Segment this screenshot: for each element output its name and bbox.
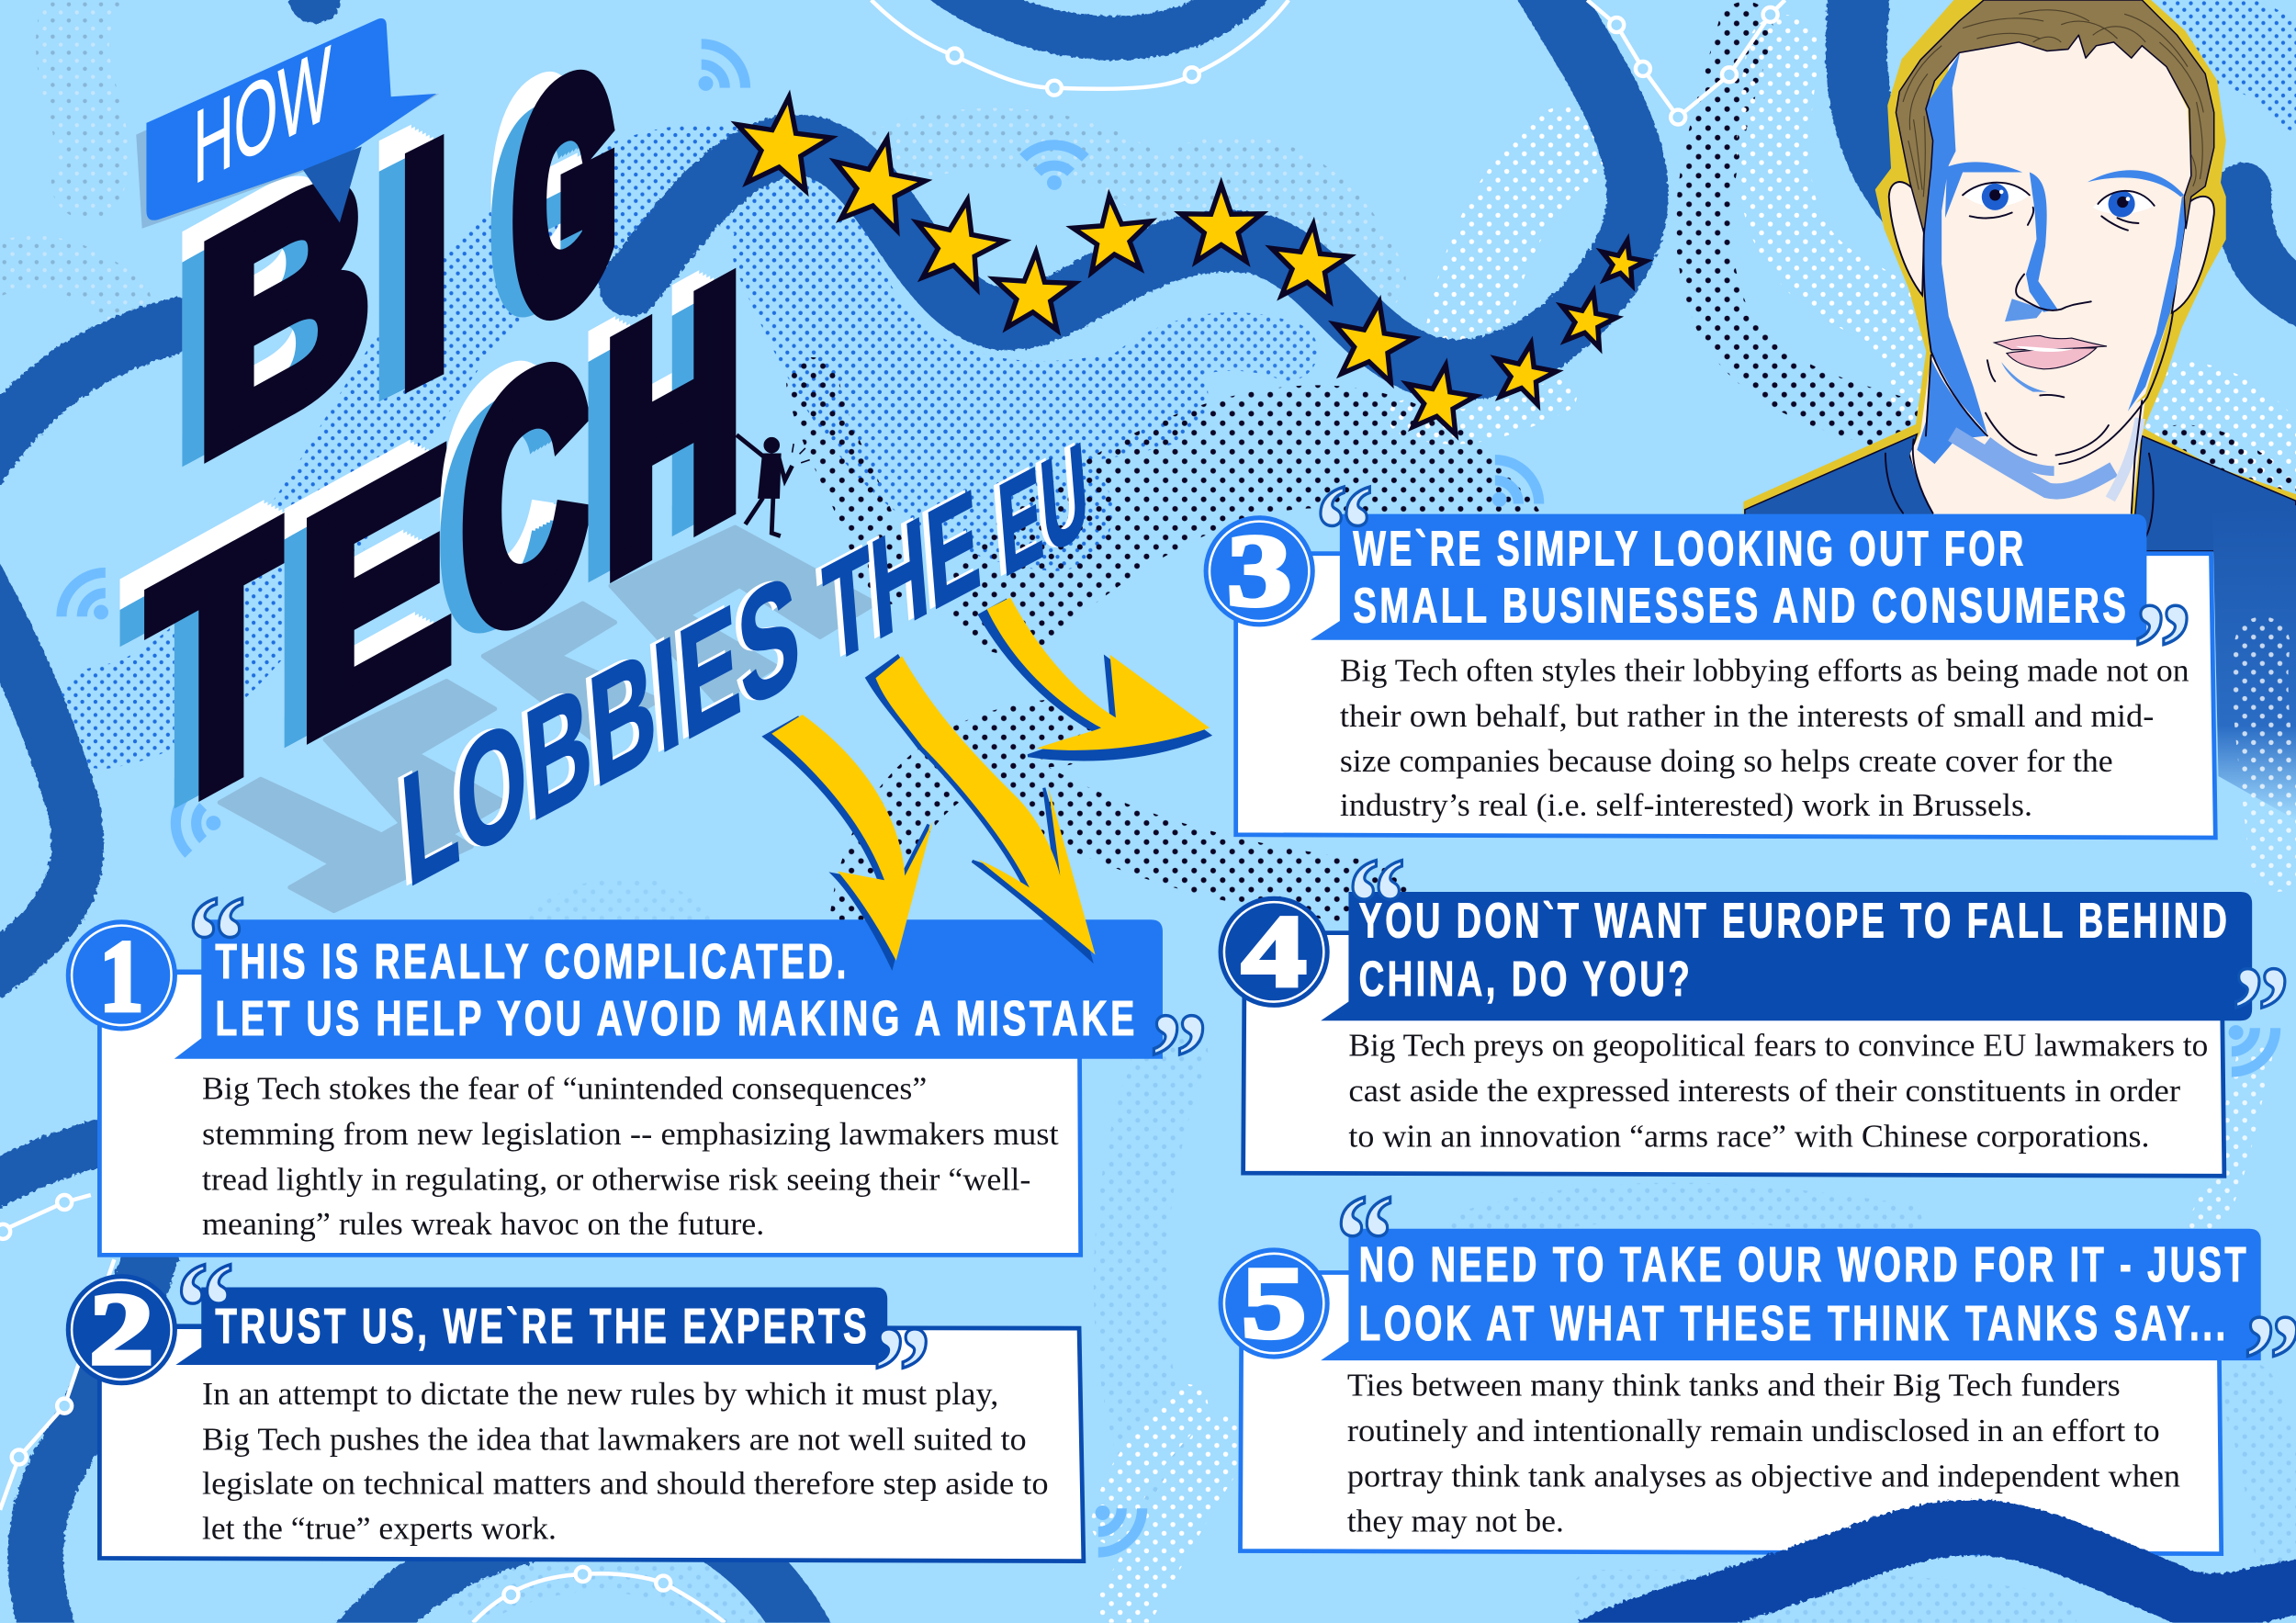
card 3 body text: Big Tech often styles their lobbying efforts as being made not on <box>1340 652 2189 688</box>
portrait: jaw lines <box>1885 229 2173 537</box>
portrait: mouth <box>1995 335 2107 369</box>
card 2 quote marks <box>175 1237 931 1444</box>
card 1 body text: stemming from new legislation -- emphasizing lawmakers must <box>202 1116 1059 1152</box>
card 1 body text: Big Tech stokes the fear of “unintended consequences” <box>202 1071 927 1107</box>
card 1 heading: THIS IS REALLY COMPLICATED. <box>215 934 850 989</box>
card 1 heading: LET US HELP YOU AVOID MAKING A MISTAKE <box>215 991 1138 1046</box>
portrait: shirt <box>1745 434 2296 551</box>
card 2 body text: legislate on technical matters and should therefore step aside to <box>202 1465 1049 1501</box>
card 5 body text: portray think tank analyses as objective and independent when <box>1347 1458 2180 1493</box>
card 3 body text: size companies because doing so helps create cover for the <box>1340 743 2113 779</box>
card 2 number badge <box>66 1273 205 1386</box>
card 4 quote marks: ” <box>2232 941 2290 1083</box>
portrait: yellow outline <box>1745 0 2296 551</box>
card 5 header banner <box>1321 1229 2261 1360</box>
card 3 body text: their own behalf, but rather in the interests of small and mid- <box>1340 698 2154 734</box>
title letter T: T <box>146 443 296 897</box>
bottom right ribbon band <box>1596 1527 2296 1623</box>
card 5 body text: routinely and intentionally remain undisclosed in an effort to <box>1347 1413 2160 1448</box>
title figure: tiny person <box>737 435 810 536</box>
portrait: neck <box>1910 355 2145 516</box>
card 1 header banner <box>174 919 1163 1059</box>
card 3 header banner <box>1311 514 2146 640</box>
card 3 quote marks: ” <box>2133 578 2192 720</box>
card 4 body text <box>1348 1028 2208 1154</box>
card 3 heading <box>1353 521 2129 634</box>
card 1 quote marks: “ <box>187 871 246 1013</box>
LOBBIES THE EU subtitle: THE <box>819 459 985 694</box>
card 2 body box <box>99 1327 1084 1561</box>
card 3 heading: WE`RE SIMPLY LOOKING OUT FOR <box>1353 521 2027 576</box>
title letter G: G <box>515 8 614 386</box>
card 4 header banner <box>1321 892 2252 1020</box>
title letter B: B <box>196 96 371 525</box>
LOBBIES THE EU subtitle: EU <box>994 413 1093 604</box>
LOBBIES THE EU subtitle: EU <box>988 413 1087 604</box>
card 3 <box>1204 459 2215 838</box>
card 4 body box <box>1244 933 2224 1176</box>
portrait: nose lines <box>2016 274 2091 310</box>
card 5 number badge: 5 <box>1242 1247 1306 1360</box>
card 1 body text: tread lightly in regulating, or otherwise risk seeing their “well- <box>202 1161 1030 1197</box>
card 2 quote marks: ” <box>872 1302 931 1444</box>
title letter shadows <box>219 527 875 911</box>
card 2 body text: Big Tech pushes the idea that lawmakers are not well suited to <box>202 1421 1027 1457</box>
card 1 quote marks: ” <box>1150 987 1208 1130</box>
card 3 body text: industry’s real (i.e. self-interested) work in Brussels. <box>1340 787 2032 823</box>
card 2 heading: TRUST US, WE`RE THE EXPERTS <box>215 1299 870 1354</box>
card 5 heading <box>1359 1237 2249 1351</box>
card 1 heading <box>215 934 1138 1046</box>
arrow to card 1 <box>764 715 933 966</box>
title letter E: E <box>298 383 454 807</box>
portrait: blue face shading <box>1924 52 1987 434</box>
card 4 quote marks: “ <box>1347 832 1406 975</box>
card 4 body text: Big Tech preys on geopolitical fears to convince EU lawmakers to <box>1348 1028 2208 1064</box>
arrow to card 2 <box>867 656 1096 959</box>
card 3 quote marks: “ <box>1315 459 1374 602</box>
white dots over shirt edge <box>2260 645 2277 864</box>
card 3 body box <box>1236 554 2215 838</box>
card 2 quote marks: “ <box>175 1237 234 1379</box>
card 4 body text: cast aside the expressed interests of their constituents in order <box>1348 1073 2180 1109</box>
card 5 body text: they may not be. <box>1347 1504 1564 1539</box>
portrait: face <box>1924 35 2191 456</box>
card 4 number badge <box>1219 896 1350 1009</box>
title letter H: H <box>605 210 741 645</box>
title letter I: I <box>393 62 456 468</box>
portrait: hair <box>1896 0 2214 233</box>
card 5 quote marks: “ <box>1335 1169 1394 1312</box>
portrait: neck shading <box>1917 358 2140 499</box>
card 2 body text <box>202 1376 1049 1547</box>
white node lines <box>0 0 1785 1623</box>
card 3 quote marks <box>1315 459 2192 720</box>
card 2 body text: let the “true” experts work. <box>202 1511 557 1547</box>
EU stars <box>729 91 1649 436</box>
card 2 header banner <box>175 1287 887 1365</box>
portrait illustration <box>1745 0 2296 551</box>
yellow arrows <box>764 598 1210 966</box>
card 5 number badge <box>1219 1247 1350 1360</box>
card 2 number badge: 2 <box>89 1273 153 1386</box>
card 4 body text: to win an innovation “arms race” with Chinese corporations. <box>1348 1118 2150 1154</box>
LOBBIES THE EU subtitle: THE <box>813 459 979 694</box>
card 5 body text: Ties between many think tanks and their Big Tech funders <box>1347 1367 2121 1403</box>
arrow to card 3 <box>980 598 1210 760</box>
portrait: eyes <box>1963 183 2155 231</box>
card 1 body text: meaning” rules wreak havoc on the future. <box>202 1206 764 1242</box>
card 4 quote marks <box>1347 832 2290 1083</box>
card 4 number badge: 4 <box>1242 896 1306 1009</box>
shirt continuation fading behind card 3 <box>2212 505 2296 820</box>
card 4 heading <box>1359 893 2230 1007</box>
LOBBIES THE EU subtitle: LOBBIES <box>396 539 805 920</box>
LOBBIES THE EU subtitle: LOBBIES <box>390 539 799 920</box>
card 3 number badge: 3 <box>1227 514 1291 627</box>
card 5 <box>1219 1169 2296 1554</box>
card 5 body box <box>1240 1273 2222 1554</box>
card 3 number badge <box>1204 514 1341 627</box>
card 1 body box <box>99 973 1081 1255</box>
card 2 <box>66 1237 1084 1561</box>
card 1 <box>66 871 1208 1255</box>
card 1 number badge: 1 <box>99 920 143 1033</box>
HOW banner <box>136 18 439 229</box>
title letter C: C <box>463 285 588 716</box>
card 5 body text <box>1347 1367 2180 1539</box>
card 1 body text <box>202 1071 1059 1242</box>
card 4 heading: CHINA, DO YOU? <box>1359 952 1693 1007</box>
card 5 quote marks <box>1335 1169 2296 1432</box>
portrait: ears <box>1889 182 2214 313</box>
card 1 quote marks <box>187 871 1208 1130</box>
card 2 body text: In an attempt to dictate the new rules by which it must play, <box>202 1376 998 1412</box>
card 3 body text <box>1340 652 2189 823</box>
card 1 number badge <box>66 919 205 1033</box>
card 4 <box>1219 832 2290 1176</box>
